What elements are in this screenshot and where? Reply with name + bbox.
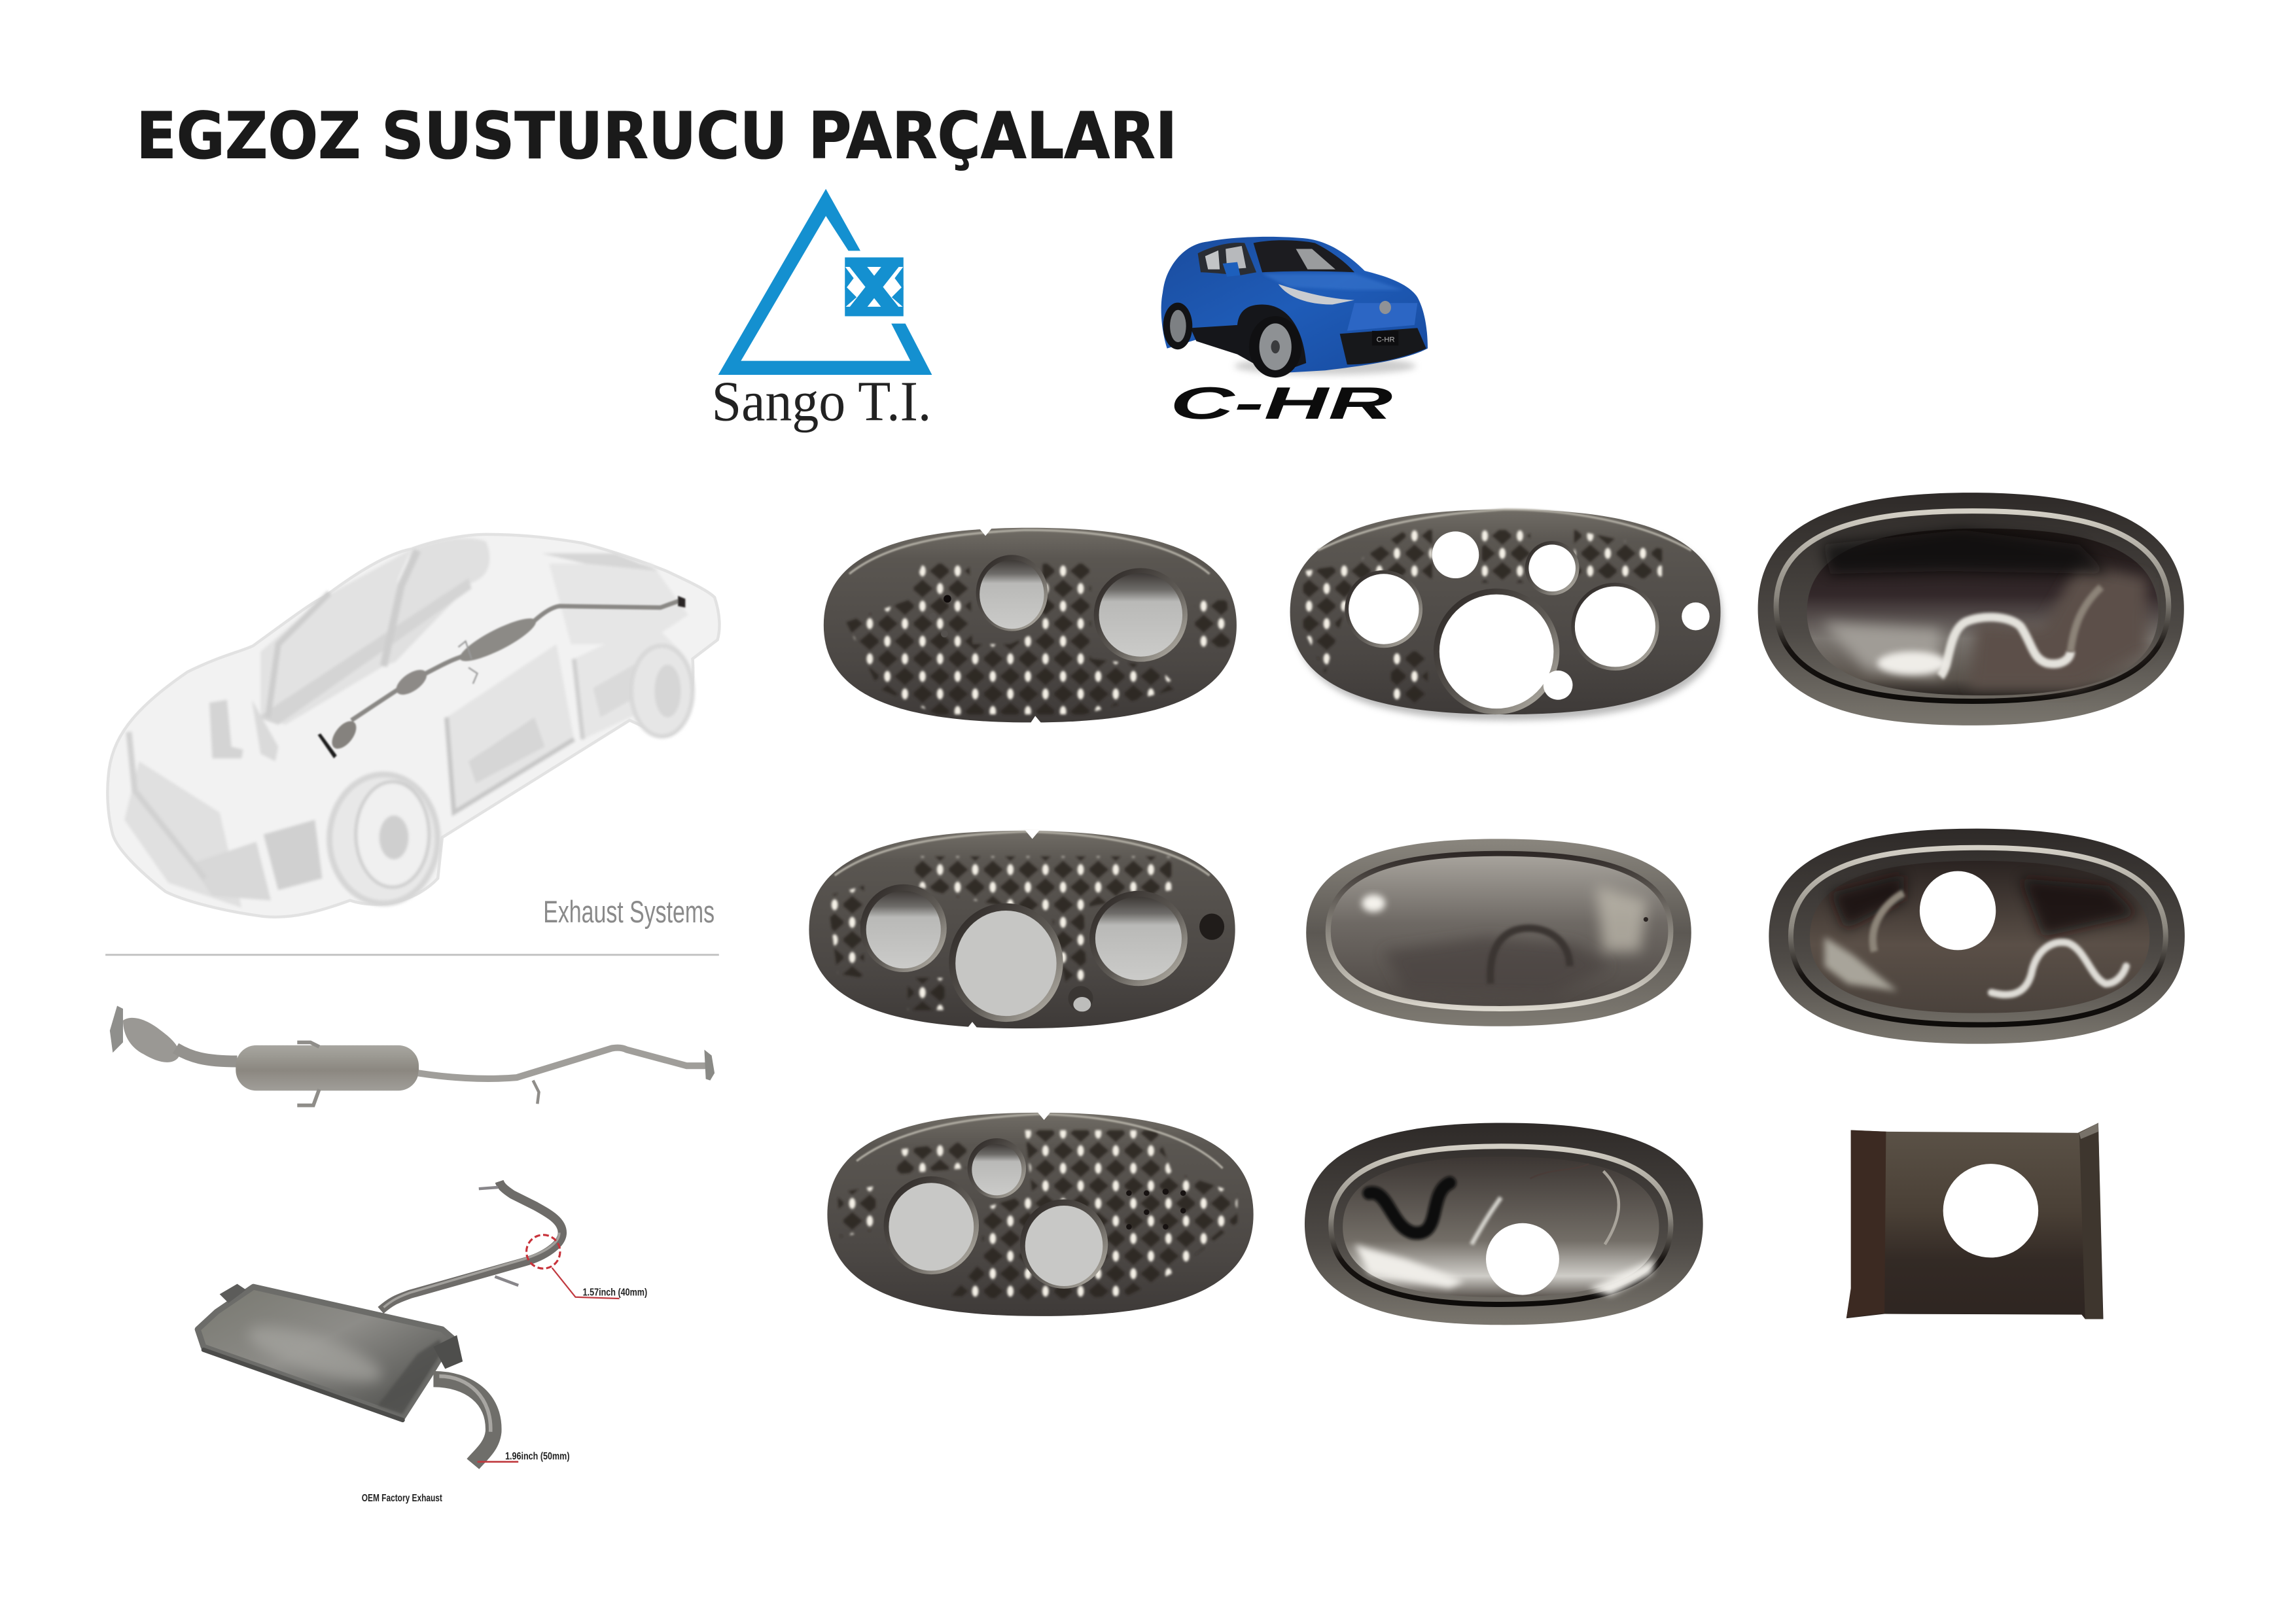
muffler box: [198, 1287, 453, 1417]
icon: hourglass monogram: [845, 257, 904, 316]
part: perforated plate 2 with open holes: [1290, 510, 1722, 720]
part: cup shell 3: [1758, 493, 2184, 725]
notches: [1025, 830, 1040, 839]
flange: [1758, 493, 2184, 725]
caption: OEM Factory Exhaust: [362, 1493, 442, 1504]
right-side brown reflection: [1969, 564, 2147, 688]
car shadow: [1235, 357, 1416, 375]
silver band lower left: [1822, 622, 1940, 676]
small hole: [1644, 917, 1648, 922]
notches: [978, 527, 993, 536]
title: EGZOZ SUSTURUCU PARÇALARI: [136, 99, 1177, 174]
side glass: [383, 538, 489, 666]
rim ring: [1791, 848, 2166, 1025]
S ridge highlight: [1992, 942, 2126, 995]
front wheel: [1249, 316, 1301, 377]
car: blue C-HR: [1161, 237, 1428, 377]
part: cup shell 8 with hole: [1305, 1123, 1703, 1325]
basin: [1343, 1157, 1659, 1297]
bright reflection: [1877, 652, 1947, 675]
rear wheel: [631, 646, 693, 737]
dark top shadows: [1830, 874, 1903, 930]
car silhouette: [107, 534, 720, 917]
basin: [1328, 854, 1670, 1009]
plate body: [809, 831, 1235, 1028]
left flange: [110, 1005, 123, 1053]
door panels: [447, 644, 574, 812]
part: smooth cup shell 5: [1306, 839, 1691, 1026]
C-HR wordmark: C-HR: [1170, 377, 1392, 428]
open holes: [1345, 570, 1422, 648]
rear wheel: [1163, 303, 1192, 349]
dashed circle marker: [527, 1235, 560, 1268]
illustration: straight exhaust assembly: [110, 1005, 715, 1106]
Toyota emblem: [1379, 301, 1391, 314]
reflections: [1362, 894, 1385, 912]
hangers: [297, 1042, 319, 1047]
mirror: [1223, 262, 1240, 277]
plate body: [1290, 510, 1721, 714]
right flange: [2079, 1123, 2103, 1319]
highlight on bonnet: [1262, 274, 1403, 290]
hand-written markings: [1530, 1164, 1589, 1179]
small perforations: [944, 595, 951, 602]
lower-left reflection: [1824, 937, 1898, 991]
holes: [968, 1138, 1026, 1198]
illustration: OEM factory exhaust with dimensions: 1.96inch (50mm): [505, 1451, 570, 1462]
bright reflections: [1354, 1244, 1464, 1288]
small perforations: [1126, 1189, 1186, 1230]
interior shading: [124, 538, 693, 908]
upstream pipe: [381, 1181, 562, 1310]
top edge highlight: [857, 1114, 1223, 1168]
basin: [1807, 529, 2159, 695]
top edge highlight: [849, 530, 1209, 574]
rim ring: [1776, 511, 2168, 701]
part: perforated plate 1: [824, 527, 1237, 725]
front wheel: [330, 775, 438, 903]
drop shadow: [1294, 515, 1722, 720]
part: rectangular clip plate with hole: [1846, 1123, 2103, 1319]
engine bay and grille: [124, 761, 241, 908]
windshield: [1254, 240, 1354, 272]
front bumper blue: [1347, 303, 1417, 331]
rear interior: [549, 564, 688, 644]
red leader lines: [552, 1268, 620, 1299]
illustration: OEM factory exhaust with dimensions: [198, 1181, 647, 1504]
illustration: transparent car with exhaust: [107, 534, 720, 929]
tail pipe: [433, 1379, 493, 1464]
rear pipe: [418, 1048, 706, 1079]
ridge highlight: [1940, 617, 2070, 676]
dimple field: [846, 564, 1178, 714]
muffler reflection: [243, 1316, 387, 1393]
logo text: Sango T.I.: [712, 369, 931, 432]
dimple fields: [1303, 530, 1432, 673]
hole: [1486, 1223, 1559, 1295]
dimple fields: [952, 1130, 1237, 1300]
flange: [1769, 829, 2185, 1044]
rim ring: [1331, 1146, 1670, 1304]
seats: [209, 700, 243, 758]
front pipe: [176, 1048, 238, 1062]
top edge highlight: [835, 831, 1209, 875]
icon: triangle: [718, 189, 932, 375]
holes: [976, 555, 1048, 631]
dimple fields: [915, 856, 1171, 984]
hangers: [479, 1187, 498, 1189]
side windows: [1198, 243, 1256, 275]
caption: Exhaust Systems: Exhaust Systems: [543, 894, 715, 929]
car body: [1161, 237, 1428, 374]
plate: [1372, 331, 1398, 345]
muffler darker end: [378, 1340, 444, 1414]
sill and wheel arch: [1190, 305, 1306, 375]
windshield: [260, 549, 412, 725]
right flange: [704, 1050, 715, 1081]
dimension labels: 1.57inch (40mm): [583, 1287, 647, 1299]
car: blue C-HR: C-HR: [1377, 336, 1395, 344]
exhaust line: [318, 596, 685, 758]
plate body: [827, 1113, 1254, 1316]
muffler lower shadow: [203, 1350, 402, 1420]
part: perforated plate 4: [809, 830, 1235, 1029]
flange: [1306, 839, 1691, 1026]
hole: [1943, 1164, 2038, 1257]
left flange: [1846, 1130, 1886, 1318]
headlight: [1279, 284, 1354, 305]
hole: [1920, 871, 1996, 950]
flange: [1305, 1123, 1703, 1325]
muffler can: [236, 1045, 419, 1091]
part: cup shell 6 with hole: [1769, 829, 2185, 1044]
top edge highlight: [1318, 510, 1691, 550]
plate body: [824, 528, 1237, 722]
basin: [1810, 861, 2149, 1013]
notches: [1036, 1111, 1051, 1120]
dark marking S: [1369, 1183, 1450, 1233]
plate body: [1846, 1123, 2103, 1319]
left ridge: [1873, 893, 1903, 952]
lower grille: [1340, 328, 1426, 364]
dark shadow band: [1823, 530, 2109, 574]
catalytic converter: [123, 1018, 179, 1062]
ridge: [1491, 928, 1570, 984]
part: perforated plate 7: [827, 1111, 1254, 1316]
logo: Sango T.I.: [712, 189, 932, 432]
holes: [860, 884, 947, 972]
muffler mounting tabs: [220, 1284, 246, 1303]
